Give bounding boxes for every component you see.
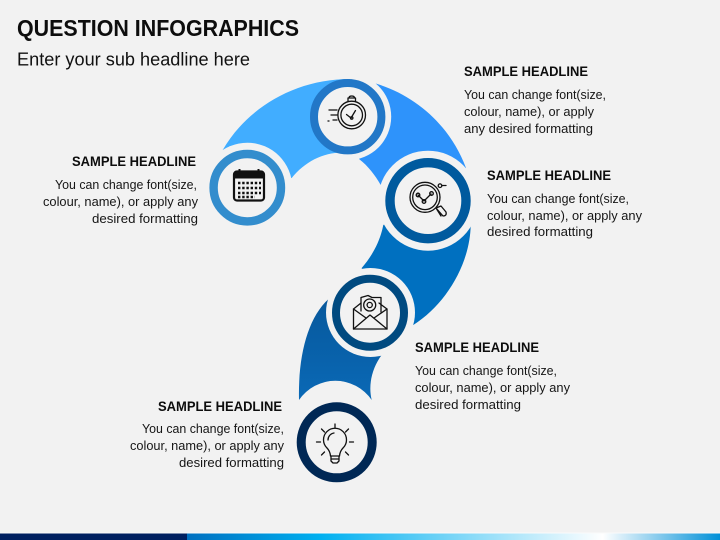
- text block: bottom left: colour, name), or apply any: [130, 438, 284, 453]
- text block: upper left: desired formatting: [92, 211, 198, 226]
- text block: middle right: You can change font(size,: [487, 191, 629, 206]
- text block: top right: SAMPLE HEADLINE: [464, 63, 588, 79]
- text block: middle right: colour, name), or apply any: [487, 208, 642, 223]
- text block: lower right: colour, name), or apply any: [415, 380, 570, 395]
- text block: bottom left: You can change font(size,: [142, 421, 284, 436]
- text block: top right: colour, name), or apply: [464, 104, 594, 119]
- calendar halo: [202, 143, 292, 233]
- segment: lower stem: [299, 299, 382, 400]
- icon: light bulb: [316, 424, 354, 463]
- ring: magnifier: [390, 163, 466, 239]
- segment: upper right arc: [347, 83, 466, 200]
- text block: upper left: You can change font(size,: [55, 177, 197, 192]
- text block: upper left: [43, 153, 198, 226]
- icon: magnifier chart: [410, 182, 446, 216]
- text block: bottom left: desired formatting: [179, 455, 284, 470]
- icon: stopwatch: [328, 96, 366, 129]
- magnifier halo: [378, 151, 478, 251]
- subtitle: Enter your sub headline here: [17, 50, 250, 70]
- text block: top right: You can change font(size,: [464, 87, 606, 102]
- segment: right curve: [362, 200, 471, 325]
- text block: top right: any desired formatting: [464, 121, 593, 136]
- text block: bottom left: [130, 398, 284, 470]
- text block: middle right: desired formatting: [487, 224, 593, 239]
- segment: upper left arc: [223, 79, 350, 188]
- icon: envelope: [354, 296, 387, 329]
- footer bar: [0, 532, 720, 540]
- ring: stopwatch: [314, 83, 381, 150]
- text block: upper left: SAMPLE HEADLINE: [72, 153, 196, 169]
- text block: lower right: desired formatting: [415, 397, 521, 412]
- ring: email: [336, 279, 404, 347]
- text block: bottom left: SAMPLE HEADLINE: [158, 398, 282, 414]
- text block: lower right: SAMPLE HEADLINE: [415, 339, 539, 355]
- text block: lower right: You can change font(size,: [415, 363, 557, 378]
- stopwatch halo: [304, 73, 391, 160]
- question mark shape: [202, 73, 478, 400]
- text block: middle right: [487, 167, 642, 239]
- text block: middle right: SAMPLE HEADLINE: [487, 167, 611, 183]
- title: QUESTION INFOGRAPHICS: [17, 15, 299, 41]
- icon: calendar: [234, 169, 264, 200]
- ring: bulb: [301, 407, 372, 478]
- ring: calendar: [214, 154, 281, 221]
- text block: upper left: colour, name), or apply any: [43, 194, 198, 209]
- text block: lower right: [415, 339, 570, 412]
- email halo: [326, 268, 415, 357]
- text block: top right: [464, 63, 606, 136]
